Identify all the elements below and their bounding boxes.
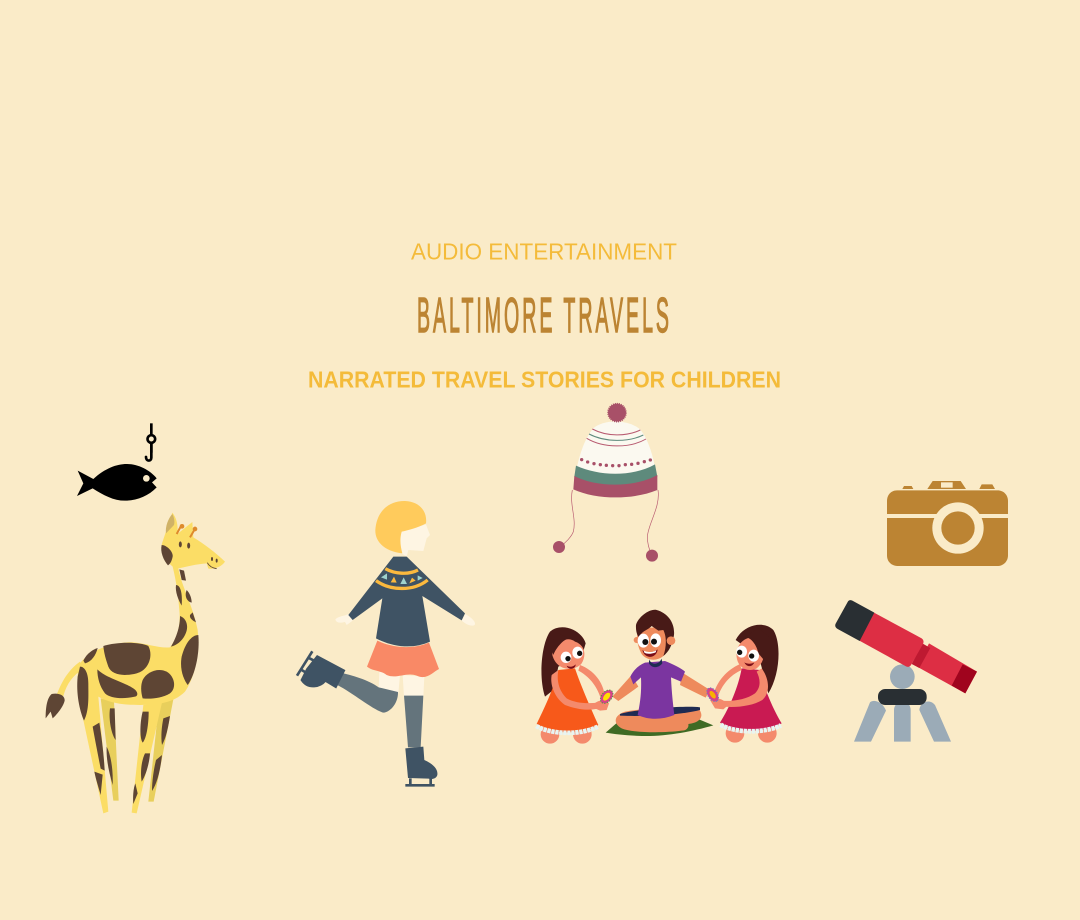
title: Baltimore Travels: BALTIMORE TRAVELS (417, 287, 669, 343)
illustration: giraffe (46, 513, 225, 813)
boy (612, 610, 710, 732)
mat (606, 718, 713, 736)
illustration: children tying bracelets (536, 610, 782, 744)
icon: fish and hook (77, 423, 157, 501)
stockings (337, 673, 423, 747)
skin: legs (379, 672, 424, 697)
icon: woolly hat (553, 404, 658, 562)
girl left (536, 627, 609, 744)
hair (375, 501, 426, 553)
illustration: telescope (835, 600, 977, 742)
sweater stripes (376, 569, 428, 588)
sweater (348, 557, 465, 646)
bracelets (598, 686, 721, 706)
girl right (710, 625, 782, 743)
raised skate (297, 651, 344, 687)
subtitle: narrated travel stories: NARRATED TRAVEL STORIES FOR CHILDREN (308, 366, 781, 392)
icon: camera (887, 481, 1008, 566)
face (400, 524, 430, 557)
skirt (367, 641, 439, 677)
illustration: ice skater (297, 501, 475, 785)
hands (335, 614, 475, 626)
standing skate (405, 747, 437, 779)
heading: audio entertainment: AUDIO ENTERTAINMENT (411, 238, 677, 264)
